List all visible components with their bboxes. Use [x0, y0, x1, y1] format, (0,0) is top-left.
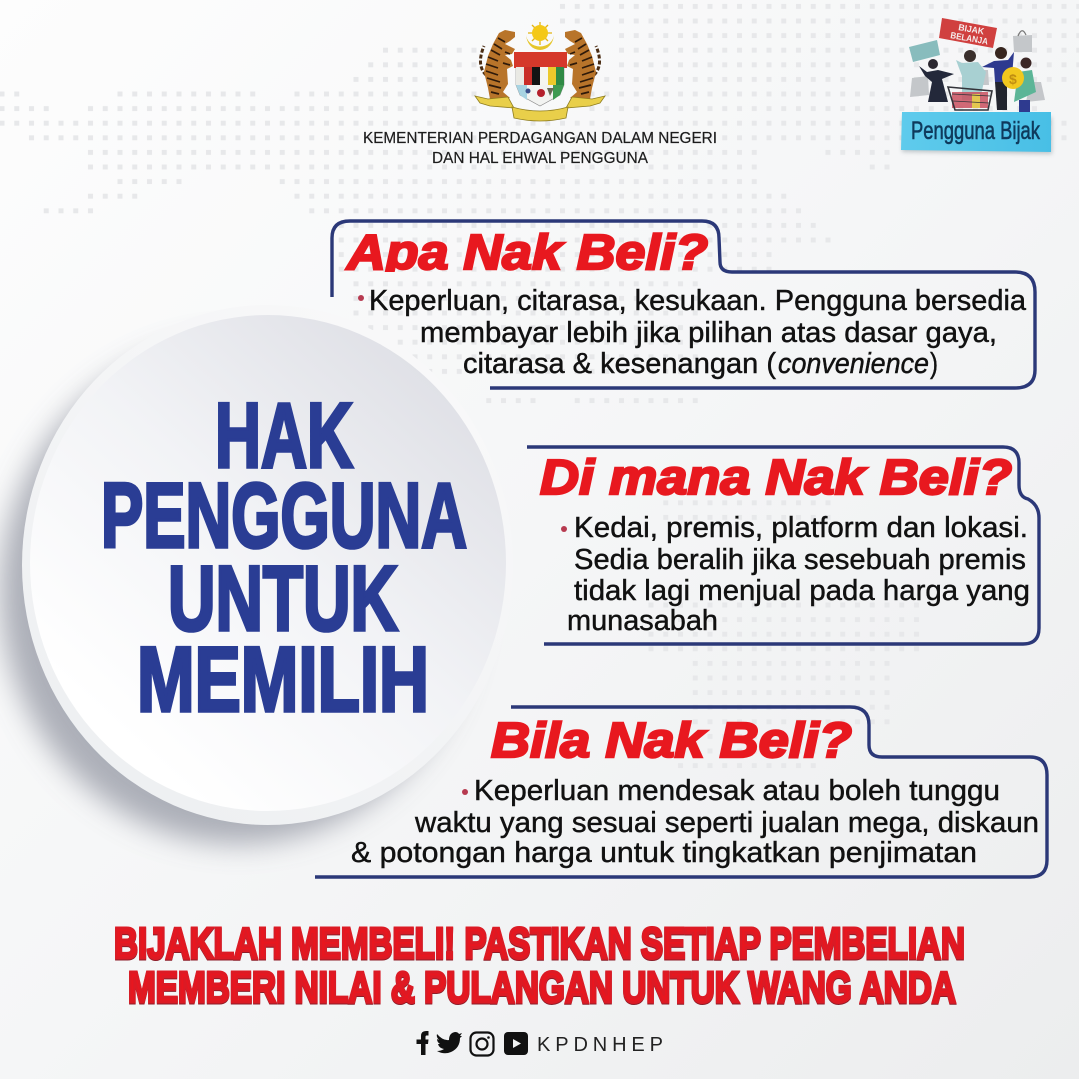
right tiger — [565, 30, 600, 100]
shoppers — [919, 47, 1036, 112]
logo: Pengguna Bijak — [901, 18, 1052, 154]
sign: Bijak Belanja: BIJAK — [958, 22, 985, 37]
icon: twitter — [437, 1032, 462, 1053]
text block — [567, 512, 1030, 637]
bullet — [561, 526, 567, 532]
title: PENGGUNA — [101, 465, 467, 567]
shield — [514, 52, 567, 106]
shopping bags — [910, 35, 1045, 102]
title — [101, 385, 467, 731]
social media row — [416, 1031, 663, 1056]
teal card sign — [909, 40, 940, 62]
text block: waktu yang sesuai seperti jualan mega, diskaun — [414, 807, 1039, 839]
text block: tidak lagi menjual pada harga yang — [574, 575, 1030, 607]
text block: Keperluan mendesak atau boleh tunggu — [474, 775, 1000, 807]
circle shadow — [0, 340, 476, 844]
title: MEMILIH — [137, 629, 429, 731]
heading: Apa Nak Beli? — [346, 226, 708, 280]
coat of arms logo — [475, 22, 605, 121]
text block: Sedia beralih jika sesebuah premis — [574, 544, 1026, 576]
panel: Apa Nak Beli — [332, 221, 1035, 388]
text block — [351, 775, 1039, 869]
text block: Kedai, premis, platform dan lokasi. — [574, 512, 1028, 544]
ministry name — [363, 130, 717, 167]
icon: instagram — [470, 1032, 494, 1056]
panel: Bila Nak Beli — [315, 707, 1047, 877]
panel: title disc — [22, 305, 513, 825]
left tiger — [480, 30, 515, 100]
call to action — [114, 919, 965, 1012]
heading: Bila Nak Beli? — [491, 714, 852, 768]
icon: facebook — [416, 1031, 428, 1055]
heading: Di mana Nak Beli? — [540, 451, 1012, 505]
title: HAK — [215, 385, 353, 487]
handle: KPDNHEP — [537, 1034, 663, 1056]
ministry name: KEMENTERIAN PERDAGANGAN DALAM NEGERI — [363, 130, 717, 147]
text block: citarasa & kesenangan ( — [463, 348, 776, 380]
bullet — [358, 295, 364, 301]
text block: & potongan harga untuk tingkatkan penjimatan — [351, 837, 977, 869]
crescent and sun — [526, 22, 554, 50]
motto ribbon — [475, 96, 605, 121]
title: UNTUK — [168, 548, 398, 650]
text block: convenience — [778, 348, 929, 380]
panel: Di mana Nak Beli — [527, 447, 1039, 644]
coin: $ — [1009, 71, 1017, 87]
text block: munasabah — [567, 605, 718, 637]
ministry name: DAN HAL EHWAL PENGGUNA — [432, 150, 649, 167]
sign: Bijak Belanja — [939, 18, 997, 48]
icon: youtube — [504, 1032, 528, 1055]
text block: ) — [930, 348, 938, 380]
text block: membayar lebih jika pilihan atas dasar gaya, — [420, 317, 997, 349]
text block: Keperluan, citarasa, kesukaan. Pengguna bersedia — [369, 285, 1027, 317]
coin — [1002, 67, 1024, 89]
bullet — [462, 789, 468, 795]
text block — [369, 285, 1027, 380]
label — [901, 112, 1052, 154]
cart — [948, 87, 992, 110]
sign: Bijak Belanja: BELANJA — [950, 30, 989, 47]
